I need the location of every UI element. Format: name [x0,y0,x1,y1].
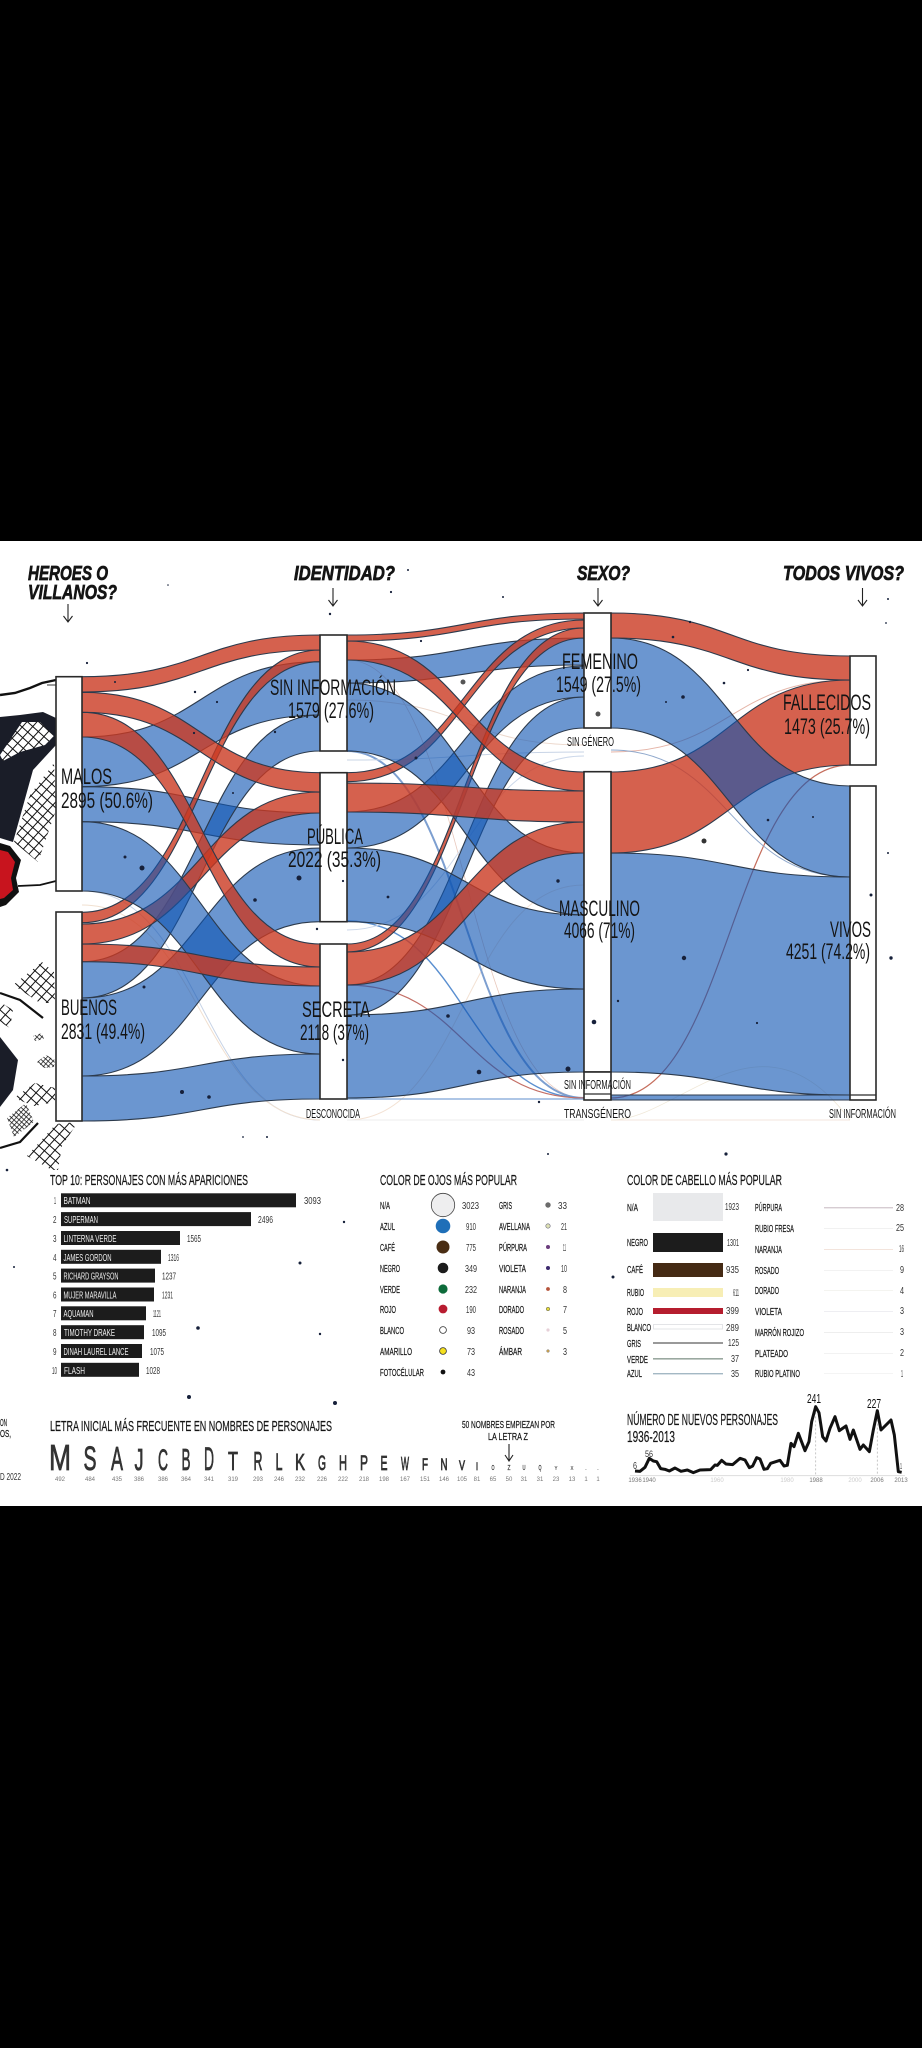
eye colour values: 910 [466,1222,476,1233]
letter row sized by frequency: Y [554,1466,558,1472]
letter counts: 23 [553,1477,560,1483]
letter row sized by frequency: R [254,1446,262,1476]
letter counts: 1 [584,1477,588,1483]
eye colour values: 33 [558,1201,567,1212]
hair colour values: 125 [728,1338,739,1349]
letter counts: 492 [55,1477,66,1483]
eye colour values: 190 [466,1305,476,1316]
bar chart: appearances: 3093 [304,1196,321,1207]
hair colour values: 28 [896,1203,904,1214]
letter row sized by frequency: D [204,1441,214,1477]
bar chart: appearances: 1565 [187,1234,201,1245]
hair colour labels: MARRÓN ROJIZO [755,1326,804,1339]
hair colour labels: PLATEADO [755,1348,788,1360]
sankey stage 2: identity to sex [347,613,584,1098]
letter row sized by frequency: W [401,1454,409,1474]
cropped credits text at left edge: D 2022 [0,1472,21,1483]
arrow [505,1444,513,1461]
bar chart: appearances: 1121 [153,1309,161,1320]
eye colour values: 3 [563,1347,567,1358]
letter row sized by frequency: . [585,1466,587,1472]
white poster background [0,541,922,1506]
eye colour labels: ÁMBAR [499,1345,522,1358]
chart axis labels: 1980 [780,1478,794,1484]
eye colour values: 232 [465,1285,477,1296]
chart axis labels: 2013 [894,1478,908,1484]
eye colour labels [380,1200,530,1379]
arrow [64,604,72,622]
eye colour labels: VIOLETA [499,1263,526,1275]
hair colour labels: BLANCO [627,1322,651,1334]
column: alive nodes [850,656,876,1100]
label: fallecidos [783,690,871,739]
label: secreta: 2118 (37%) [300,1020,369,1045]
label: femenino: 1549 (27.5%) [556,672,641,697]
bar chart: appearances: 7 [53,1309,57,1320]
letter row sized by frequency: F [422,1455,428,1474]
heading: heroes or villains: VILLANOS? [28,582,117,604]
chart axis labels: 1960 [710,1478,724,1484]
chart annotations: 1 [900,1462,902,1471]
letter counts: 151 [420,1477,431,1483]
heading: new characters: NÚMERO DE NUEVOS PERSONAJES [627,1410,778,1429]
bar chart: appearances: FLASH [64,1365,85,1377]
eye colour labels: FOTOCÉLULAR [380,1366,424,1379]
hair colour labels: VERDE [627,1354,648,1366]
eye colour values: 775 [466,1243,476,1254]
letter row sized by frequency: U [522,1465,526,1472]
eye colour labels: ROSADO [499,1325,524,1337]
chart axis labels: 1988 [809,1478,823,1484]
hair colour labels: RUBIO FRESA [755,1223,794,1235]
panel: new characters per year [627,1391,908,1484]
bar chart: appearances: 1 [54,1196,56,1207]
text: 11 [563,1243,566,1254]
heading: top 10: TOP 10: PERSONAJES CON MÁS APARICIONES [50,1172,248,1189]
hair colour labels: DORADO [755,1285,779,1297]
hair colour labels: AZUL [627,1368,642,1380]
bar chart: appearances: 2496 [258,1215,273,1226]
label: sin genero: SIN GÉNERO [567,734,614,749]
letter counts: 31 [521,1477,528,1483]
text: 16 [899,1244,904,1255]
bar chart: appearances: BATMAN [64,1195,90,1207]
eye colour labels: ROJO [380,1304,396,1316]
label: publica: PÚBLICA [307,824,363,849]
arrow [328,588,338,606]
callout: letter z [462,1419,555,1443]
letter counts: 484 [85,1477,96,1483]
heading: new characters [627,1410,778,1446]
label: sin informacion identity: 1579 (27.6%) [288,698,374,723]
heading: eye colour: COLOR DE OJOS MÁS POPULAR [380,1172,517,1189]
eye colour labels: CAFÉ [380,1241,395,1254]
bar chart: appearances: DINAH LAUREL LANCE [64,1346,128,1358]
label: malos [61,764,153,813]
eye colour labels: DORADO [499,1304,524,1316]
letter counts: 198 [379,1477,390,1483]
eye colour labels: PÚRPURA [499,1241,527,1254]
illustration: comic character at left edge [0,680,78,1170]
column: identity nodes [320,635,347,1099]
bar chart: appearances: 1316 [168,1253,179,1264]
chart axis labels [628,1478,908,1484]
eye colour values [462,1201,567,1379]
chart annotations [633,1391,902,1472]
letter row sized by frequency: M [49,1437,71,1478]
label: sin informacion identity [270,675,396,723]
label: transgenero: TRANSGÉNERO [564,1106,631,1121]
eye colour labels: AZUL [380,1221,395,1233]
letter row sized by frequency: N [440,1455,448,1474]
eye colour values: 5 [563,1326,567,1337]
letter counts: 146 [439,1477,450,1483]
label: malos: MALOS [61,764,112,789]
letter row sized by frequency: J [134,1442,144,1477]
eye colour values: 3023 [462,1201,479,1212]
letter counts: 386 [158,1477,169,1483]
eye colour labels: GRIS [499,1200,512,1212]
label: buenos [61,995,145,1044]
label: fallecidos: 1473 (25.7%) [784,714,870,739]
hair colour values [725,1202,904,1380]
eye colour values: 93 [467,1326,475,1337]
hair colour values: 3 [900,1327,904,1338]
eye colour labels: NEGRO [380,1263,400,1275]
hair colour labels: PÚRPURA [755,1201,782,1214]
letter counts: 341 [204,1477,215,1483]
line chart [630,1407,905,1476]
bar chart: appearances: SUPERMAN [64,1214,98,1226]
hair colour values: 2 [900,1348,904,1359]
label: masculino: MASCULINO [559,896,640,921]
hair colour labels: RUBIO [627,1287,644,1299]
eye colour labels: BLANCO [380,1325,404,1337]
label: publica: 2022 (35.3%) [288,847,381,872]
bar chart: appearances: 4 [53,1253,57,1264]
chart axis labels: 1940 [642,1478,656,1484]
faint thin flows [82,660,850,1120]
eye colour labels: AVELLANA [499,1221,530,1233]
letter counts: 364 [181,1477,192,1483]
eye colour values: 10 [561,1264,567,1275]
hair colour values: 1 [901,1369,903,1380]
hair colour labels [627,1201,804,1380]
letter row sized by frequency: P [360,1452,368,1475]
hair colour bars [653,1193,893,1374]
hair colour values: 289 [726,1323,739,1334]
hair colour labels: NARANJA [755,1244,782,1256]
bar chart: appearances: 10 [52,1366,57,1377]
arrow [594,588,602,606]
hair colour values: 611 [733,1288,739,1299]
hair colour labels: CAFÉ [627,1263,643,1276]
bar chart: appearances [52,1193,321,1377]
bar chart: appearances: 1095 [152,1328,166,1339]
eye colour labels: VERDE [380,1284,400,1296]
letter counts [55,1477,600,1483]
letter row sized by frequency: B [182,1442,190,1477]
hair colour values: 1923 [725,1202,739,1213]
hair colour values: 25 [896,1223,904,1234]
sankey stage 1: heroes or villains to identity [82,635,320,1121]
letter row sized by frequency: O [492,1465,495,1472]
letter row sized by frequency: K [295,1449,305,1475]
hair colour labels: ROJO [627,1306,643,1318]
hair colour values: 935 [726,1265,739,1276]
letter counts: 435 [112,1477,123,1483]
letter row sized by frequency: I [476,1461,478,1473]
letter row sized by frequency: Z [508,1465,511,1472]
chart annotations: 241 [807,1391,821,1406]
label: desconocida: DESCONOCIDA [306,1106,360,1121]
bar chart: appearances: 1028 [146,1366,160,1377]
bar chart: appearances: 6 [53,1290,57,1302]
chart annotations: 6 [633,1461,637,1472]
letter counts: 13 [569,1477,576,1483]
hair colour values: 399 [726,1306,739,1317]
bar chart: appearances: 2 [53,1215,57,1226]
label: femenino [556,649,641,697]
callout: letter z: LA LETRA Z [488,1431,528,1443]
label: publica [288,824,381,872]
letter counts: 293 [253,1477,264,1483]
heading: heroes or villains: HEROES O [28,563,108,585]
hair colour labels: NEGRO [627,1237,648,1249]
heading: identity: IDENTIDAD? [294,563,395,585]
letter counts: 50 [506,1477,513,1483]
letter row sized by frequency: Q [538,1465,542,1472]
letter row sized by frequency: S [84,1440,96,1478]
letter counts: 31 [537,1477,544,1483]
hair colour labels: VIOLETA [755,1306,782,1318]
panel: initial letter frequency [49,1418,600,1483]
heading: sex: SEXO? [577,563,630,585]
chart axis labels: 2000 [848,1478,862,1484]
sankey stage 3: sex to alive or dead [611,613,850,1100]
callout: letter z: 50 NOMBRES EMPIEZAN POR [462,1419,555,1431]
bar chart: appearances: JAMES GORDON [64,1252,112,1264]
panel: eye colour [380,1172,567,1379]
eye colour circles [431,1193,551,1374]
heading: heroes or villains [28,563,117,604]
hair colour values: 4 [900,1286,904,1297]
letter row sized by frequency: V [459,1457,465,1473]
bar chart: appearances: MUJER MARAVILLA [64,1290,116,1302]
arrow [858,588,867,606]
hair colour labels: GRIS [627,1338,641,1350]
cropped credits text at left edge: ON [0,1417,7,1429]
letter counts: 81 [474,1477,481,1483]
label: femenino: FEMENINO [562,649,638,674]
label: masculino: 4066 (71%) [564,918,635,943]
label: secreta: SECRETA [302,997,370,1022]
column: sex nodes [584,613,611,1100]
letter row sized by frequency: . [597,1466,599,1472]
hair colour values: 35 [731,1369,739,1380]
label: vivos: VIVOS [830,917,871,942]
bar chart: appearances: AQUAMAN [64,1308,94,1320]
column: heroes or villains nodes [56,677,82,1121]
ink speckles [6,569,893,1405]
letter row sized by frequency: H [339,1452,347,1475]
label: fallecidos: FALLECIDOS [783,690,871,715]
hair colour labels: N/A [627,1202,638,1214]
bar chart: appearances: RICHARD GRAYSON [64,1270,118,1282]
hair colour values: 1301 [727,1238,739,1249]
bar chart: appearances: TIMOTHY DRAKE [64,1327,115,1339]
cropped credits text at left edge [0,1417,21,1483]
chart axis labels: 1936 [628,1478,642,1484]
letter counts: 222 [338,1477,349,1483]
bar chart: appearances: 9 [53,1347,57,1358]
bar chart: appearances: 3 [53,1234,57,1245]
chart annotations: 56 [645,1449,653,1459]
eye colour values: 7 [563,1305,567,1316]
hair colour values: 3 [900,1306,904,1317]
letter counts: 167 [400,1477,411,1483]
letter row sized by frequency: X [570,1466,574,1472]
panel: top 10 characters [50,1172,321,1377]
bar chart: appearances: 5 [53,1272,57,1282]
label: malos: 2895 (50.6%) [61,788,153,813]
letter counts: 1 [596,1477,600,1483]
letter counts: 232 [295,1477,306,1483]
letter row sized by frequency: G [318,1452,326,1475]
hair colour labels: ROSADO [755,1265,779,1277]
letter counts: 386 [134,1477,145,1483]
bar chart: appearances: 8 [53,1328,57,1339]
label: masculino [559,896,640,943]
label: secreta [300,997,370,1045]
bar chart: appearances: 1075 [150,1347,164,1358]
label: buenos: BUENOS [61,995,117,1020]
chart axis labels: 2006 [870,1478,884,1484]
label: vivos [786,917,871,964]
letter row sized by frequency: L [276,1449,282,1476]
letter counts: 65 [490,1477,497,1483]
eye colour labels: NARANJA [499,1284,526,1296]
label: buenos: 2831 (49.4%) [61,1019,145,1044]
eye colour values: 73 [467,1347,475,1358]
letter counts: 319 [228,1477,239,1483]
bar chart: appearances: 1237 [162,1272,176,1282]
letter counts: 246 [274,1477,285,1483]
letter counts: 226 [317,1477,328,1483]
letter counts: 218 [359,1477,370,1483]
heading: initial letter: LETRA INICIAL MÁS FRECUENTE EN NOMBRES DE PERSONAJES [50,1418,332,1435]
letter row sized by frequency [49,1437,599,1478]
cropped credits text at left edge: OS, [0,1428,11,1440]
letter counts: 105 [457,1477,468,1483]
hair colour labels: RUBIO PLATINO [755,1368,800,1380]
chart annotations: 227 [867,1396,881,1411]
label: sin informacion identity: SIN INFORMACIÓN [270,675,396,700]
heading: new characters: 1936-2013 [627,1429,675,1446]
eye colour values: 8 [563,1285,567,1296]
hair colour values: 9 [900,1265,904,1276]
letter row sized by frequency: E [380,1453,388,1475]
letter row sized by frequency: C [158,1444,168,1477]
letter row sized by frequency: T [228,1446,238,1476]
eye colour values: 349 [465,1264,477,1275]
eye colour values: 21 [561,1222,567,1233]
bar chart: appearances: 1231 [162,1290,173,1302]
bar chart: appearances: LINTERNA VERDE [64,1233,116,1245]
label: vivos: 4251 (74.2%) [786,939,870,964]
eye colour labels: N/A [380,1200,390,1212]
panel: hair colour [627,1172,904,1380]
letter row sized by frequency: A [111,1440,123,1477]
label: sin informacion sex: SIN INFORMACIÓN [564,1077,631,1092]
eye colour values: 43 [467,1368,475,1379]
heading: hair colour: COLOR DE CABELLO MÁS POPULAR [627,1172,782,1189]
eye colour labels: AMARILLO [380,1346,412,1358]
hair colour values: 37 [731,1354,739,1365]
